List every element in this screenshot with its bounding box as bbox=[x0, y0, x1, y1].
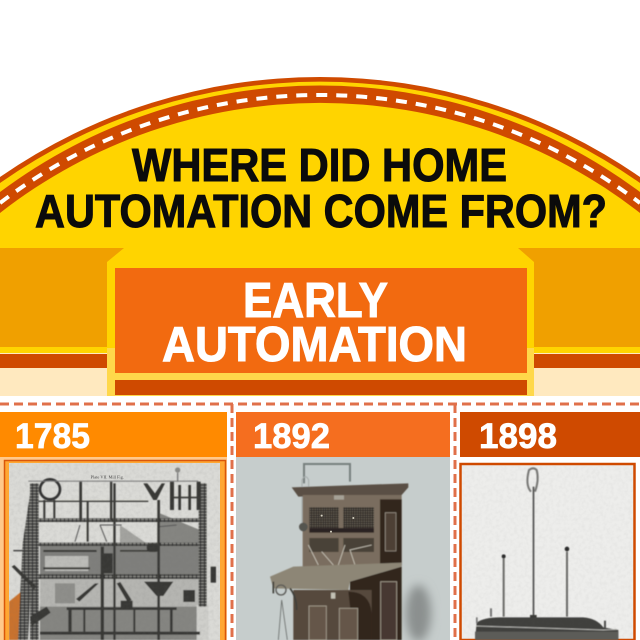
ribbon: left tail bbox=[0, 248, 124, 396]
section heading: AUTOMATION bbox=[162, 318, 467, 372]
illustration: switchboard desk bbox=[270, 464, 431, 640]
image panel 1892 bbox=[236, 457, 450, 640]
image frame 1785 bbox=[0, 457, 227, 640]
engraving grain 1785 bbox=[9, 463, 220, 640]
year header 1898 bbox=[460, 412, 640, 457]
year header 1898: 1898 bbox=[479, 417, 557, 456]
year header 1892: 1892 bbox=[253, 417, 330, 456]
year header 1785: 1785 bbox=[15, 417, 90, 456]
title bbox=[35, 139, 607, 237]
illustration: automated mill engraving: Plate VII. Mill Fig. bbox=[91, 475, 124, 480]
header arch bbox=[0, 77, 640, 396]
section heading bbox=[162, 274, 467, 372]
title: WHERE DID HOME bbox=[132, 139, 507, 191]
section heading: EARLY bbox=[243, 274, 388, 328]
dashed dividers bbox=[0, 404, 640, 640]
photo grain 1898 bbox=[462, 466, 633, 640]
image frame 1898 bbox=[460, 464, 634, 640]
card: 1785 bbox=[0, 412, 227, 640]
year header 1892 bbox=[236, 412, 450, 457]
card: 1892 bbox=[236, 412, 450, 640]
ribbon: right tail bbox=[518, 248, 640, 396]
illustration: remote-controlled boat bbox=[475, 468, 618, 640]
illustration: automated mill engraving bbox=[9, 467, 216, 640]
card: 1898 bbox=[460, 412, 640, 640]
year header 1785 bbox=[0, 412, 227, 457]
section banner bbox=[107, 262, 534, 396]
